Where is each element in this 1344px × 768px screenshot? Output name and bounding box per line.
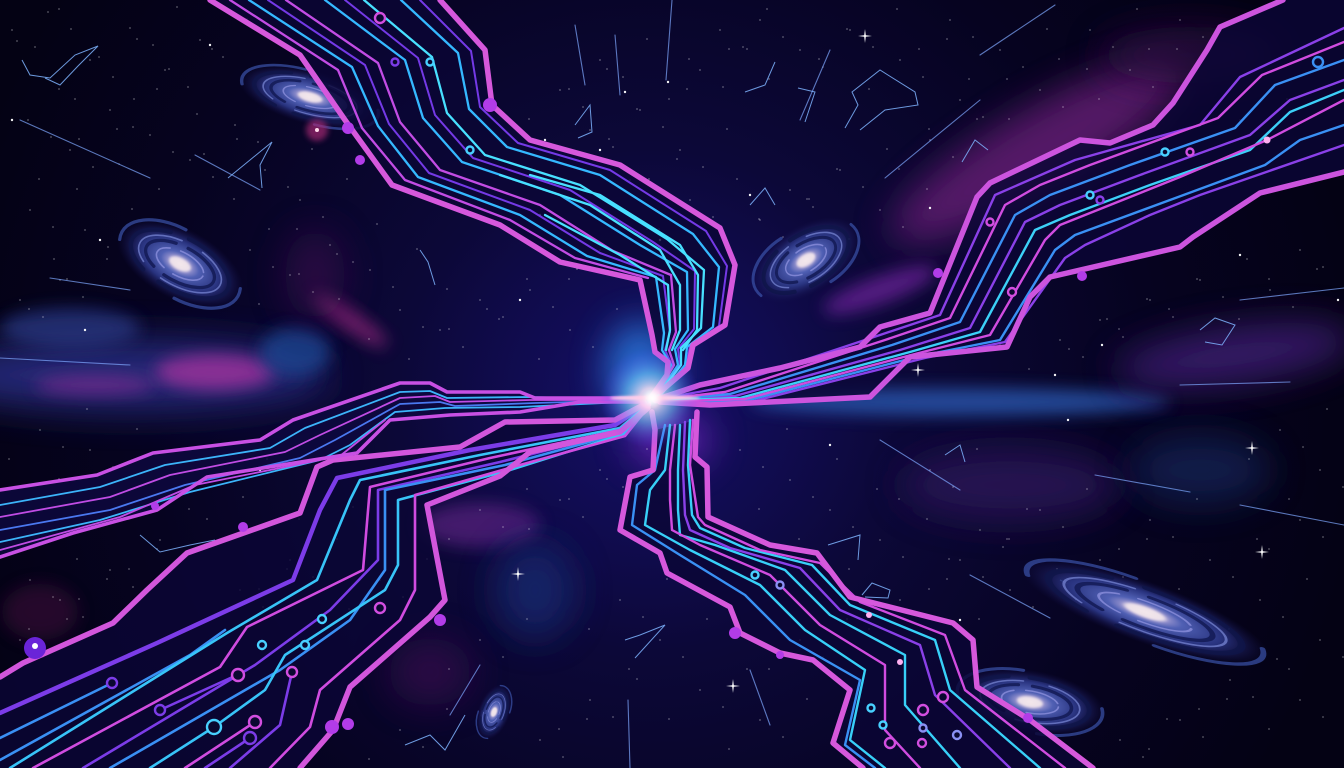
circuit arm: top left	[210, 0, 735, 398]
magenta edges	[620, 412, 1093, 768]
galaxy: left	[102, 200, 258, 328]
magenta edges	[655, 0, 1344, 405]
circuit arm: upper right	[655, 0, 1344, 405]
galaxy: bottom right	[949, 657, 1111, 747]
red star glow	[306, 119, 328, 141]
circuit arm: lower left	[0, 402, 650, 768]
magenta edges	[210, 0, 735, 396]
magenta edges	[0, 404, 648, 768]
galaxy: bottom centre	[469, 679, 519, 745]
galaxy: lower right	[1011, 539, 1279, 685]
central light burst	[600, 348, 700, 448]
galaxy: top left	[232, 52, 388, 142]
bright sparkle stars	[511, 29, 1269, 693]
magenta edges	[0, 383, 645, 557]
magenta solder points	[24, 98, 1270, 734]
galaxy: centre right	[737, 199, 875, 321]
circuit arm: left	[0, 383, 645, 557]
circuit arm: lower right	[620, 412, 1093, 768]
